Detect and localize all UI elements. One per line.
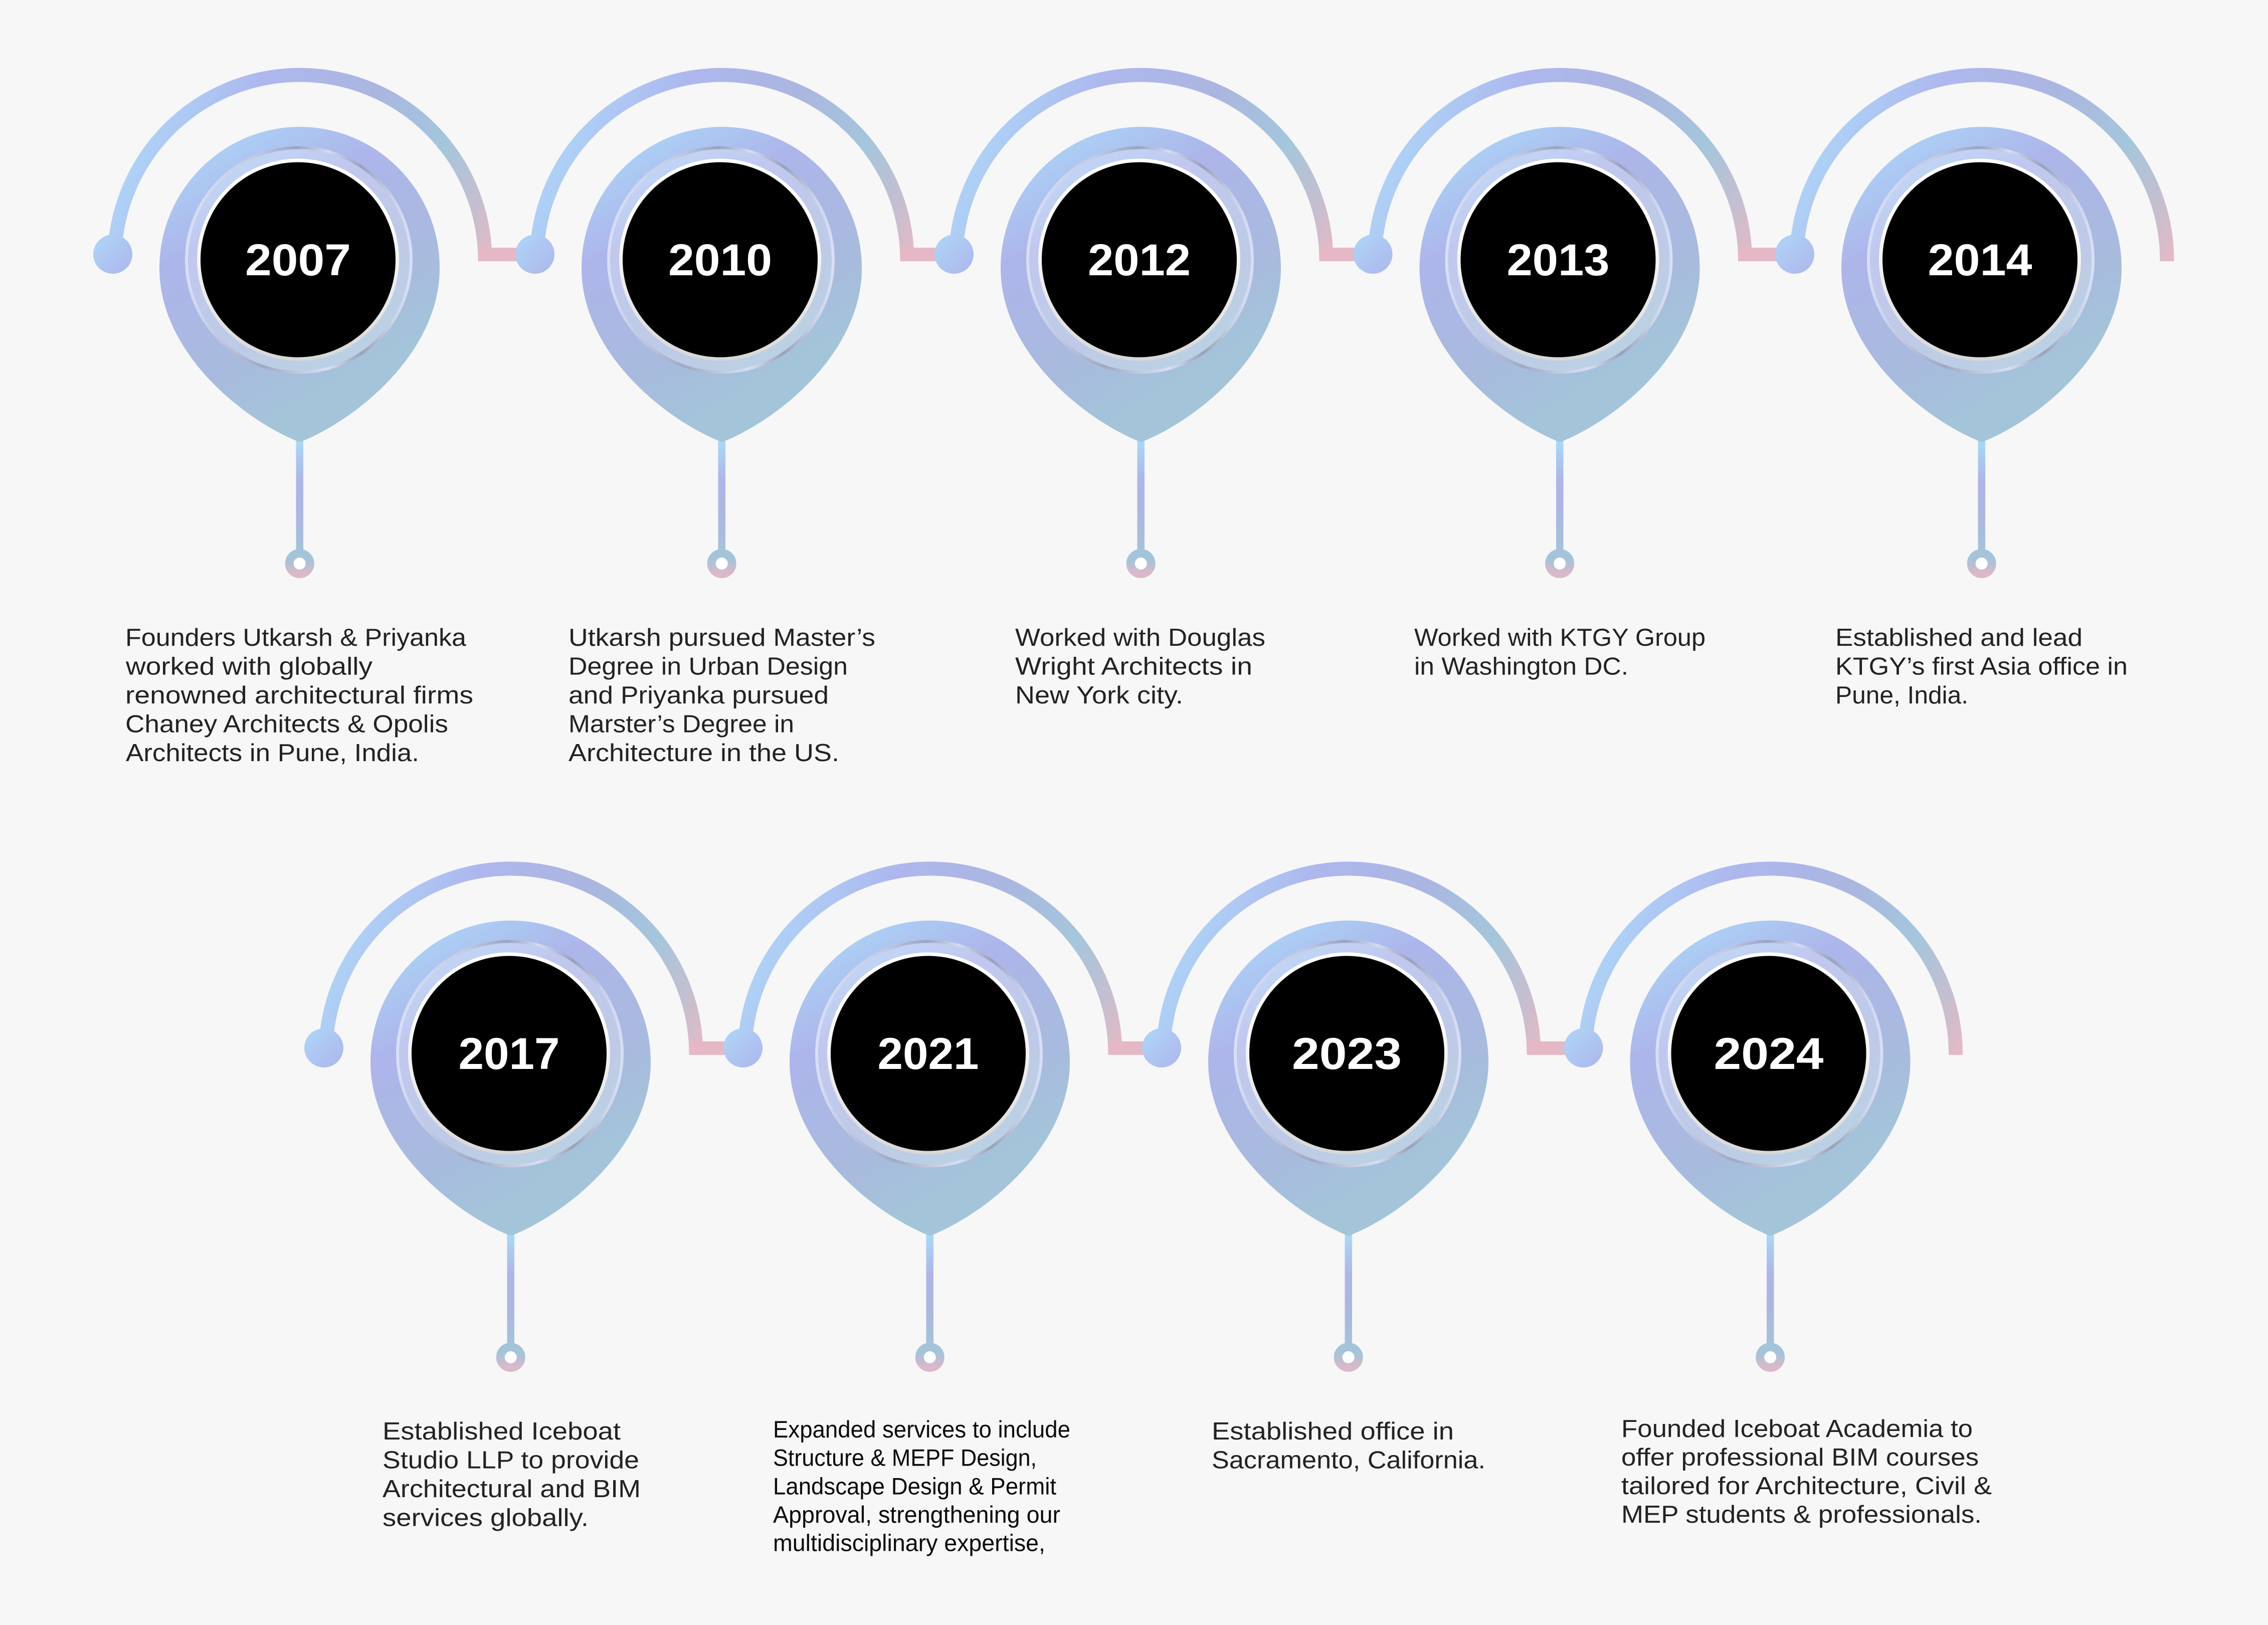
year: 2007 [245,235,351,285]
text: 2024 description [1621,1415,1992,1528]
connector arc [326,868,696,1055]
glass ring [1657,942,1882,1166]
year badge [1881,160,2080,359]
connector arc [1585,868,1956,1055]
year: 2010 [668,235,772,285]
text: 2024 description: Founded Iceboat Academia to [1621,1415,1973,1442]
text: 2010 description: Degree in Urban Design [569,653,848,680]
glass ring [1028,148,1252,373]
year badge [1669,954,1868,1153]
text: 2010 description [569,624,875,767]
milestone 2023 [1142,868,1583,1368]
year badge [1459,160,1657,359]
text: 2021 description: multidisciplinary expertise, [773,1530,1045,1556]
stem [926,1234,933,1347]
start dot [1142,1028,1181,1067]
glass disc [1868,147,2093,372]
pin [1630,921,1910,1236]
text: 2012 description: Worked with Douglas [1015,624,1265,651]
text: 2010 description: Utkarsh pursued Master’s [569,624,875,651]
start dot [93,235,132,274]
glass disc [817,942,1041,1166]
stem [296,440,303,553]
stem [1767,1234,1774,1347]
text: 2014 description [1835,624,2128,709]
glass disc [186,147,411,372]
glass ring [817,942,1041,1166]
stem [1345,1234,1352,1347]
year: 2017 [458,1028,559,1078]
pin [159,127,440,442]
text: 2007 description: worked with globally [125,653,373,680]
stem [1137,440,1145,553]
glass ring [609,148,833,373]
text: 2021 description: Expanded services to include [773,1416,1070,1442]
pin [1841,127,2122,442]
glass ring [186,148,411,373]
year: 2012 [1088,235,1191,285]
milestone 2013 [1354,75,1794,574]
text: 2013 description: in Washington DC. [1414,653,1628,680]
end ring [1338,1347,1359,1368]
connector bar [1739,248,1794,261]
text: 2014 description: KTGY’s first Asia office in [1835,653,2128,680]
connector bar [479,248,534,261]
text: 2017 description: Architectural and BIM [383,1476,641,1503]
milestone 2017 [304,868,745,1368]
text: 2017 description: Studio LLP to provide [383,1447,639,1474]
year badge [1247,954,1446,1153]
text: 2021 description [773,1416,1070,1556]
end ring [1130,554,1151,574]
start dot [304,1028,343,1067]
text: 2007 description: renowned architectural firms [125,682,473,709]
year badge [410,954,609,1153]
connector bar [1320,248,1375,261]
pin [790,921,1070,1236]
text: 2024 description: offer professional BIM courses [1621,1444,1979,1471]
milestone 2012 [934,75,1375,574]
year: 2023 [1292,1028,1402,1078]
glass ring [1868,148,2093,373]
text: 2023 description: Sacramento, California. [1212,1447,1485,1474]
stem [718,440,725,553]
start dot [723,1028,763,1067]
start dot [934,235,974,274]
milestone 2010 [515,75,956,574]
milestone 2024 [1564,868,1956,1368]
end ring [1971,554,1992,574]
text: 2017 description [383,1418,641,1531]
pin [1208,921,1488,1236]
text: 2021 description: Landscape Design & Permit [773,1473,1056,1499]
glass ring [1447,148,1671,373]
end ring [289,554,310,574]
year badge [829,954,1028,1153]
connector bar [1109,1041,1164,1055]
start dot [1564,1028,1603,1067]
stem [1978,440,1985,553]
year badge [621,160,819,359]
pin [1420,127,1699,442]
end ring [711,554,732,574]
start dot [1775,235,1814,274]
connector arc [114,75,485,261]
text: 2007 description [125,624,473,767]
text: 2013 description: Worked with KTGY Group [1414,624,1706,651]
year badge [199,160,397,359]
text: 2012 description: New York city. [1015,682,1183,709]
start dot [515,235,554,274]
connector bar [901,248,956,261]
pin [370,921,651,1236]
connector arc [1375,75,1745,261]
end ring [1760,1347,1781,1368]
text: 2024 description: MEP students & professionals. [1621,1501,1982,1528]
text: 2007 description: Founders Utkarsh & Priyanka [125,624,467,651]
text: 2010 description: Marster’s Degree in [569,711,794,738]
year: 2021 [877,1028,979,1078]
text: 2007 description: Chaney Architects & Opolis [125,711,448,738]
text: 2010 description: and Priyanka pursued [569,682,829,709]
connector arc [536,75,907,261]
text: 2012 description: Wright Architects in [1015,653,1252,680]
end ring [500,1347,521,1368]
text: 2017 description: services globally. [383,1504,589,1531]
glass disc [609,147,833,372]
text: 2010 description: Architecture in the US. [569,740,839,767]
text: 2024 description: tailored for Architecture, Civil & [1621,1473,1992,1500]
text: 2014 description: Established and lead [1835,624,2083,651]
start dot [1354,235,1393,274]
year: 2013 [1507,235,1609,285]
connector arc [1163,868,1534,1055]
text: 2007 description: Architects in Pune, India. [126,740,419,767]
text: 2013 description [1414,624,1706,680]
year badge [1040,160,1238,359]
glass disc [1028,147,1252,372]
year: 2024 [1714,1028,1824,1078]
connector arc [745,868,1115,1055]
text: 2017 description: Established Iceboat [383,1418,621,1445]
pin [1001,127,1281,442]
text: 2021 description: Approval, strengthening our [773,1501,1060,1528]
end ring [919,1347,940,1368]
year: 2014 [1928,235,2032,285]
glass ring [1235,942,1460,1166]
stem [1556,440,1563,553]
milestone 2021 [723,868,1164,1368]
text: 2012 description [1015,624,1265,709]
milestone 2014 [1775,75,2167,574]
glass disc [1235,942,1460,1166]
glass disc [398,942,622,1166]
pin [582,127,862,442]
text: 2023 description: Established office in [1212,1418,1454,1445]
connector arc [956,75,1327,261]
connector arc [1797,75,2167,261]
milestone 2007 [93,75,534,574]
text: 2021 description: Structure & MEPF Design, [773,1445,1037,1471]
text: 2014 description: Pune, India. [1835,682,1968,709]
glass disc [1657,942,1882,1166]
glass disc [1447,147,1671,372]
connector bar [1528,1041,1583,1055]
text: 2023 description [1212,1418,1485,1474]
end ring [1550,554,1570,574]
connector bar [690,1041,745,1055]
glass ring [398,942,622,1166]
stem [507,1234,514,1347]
